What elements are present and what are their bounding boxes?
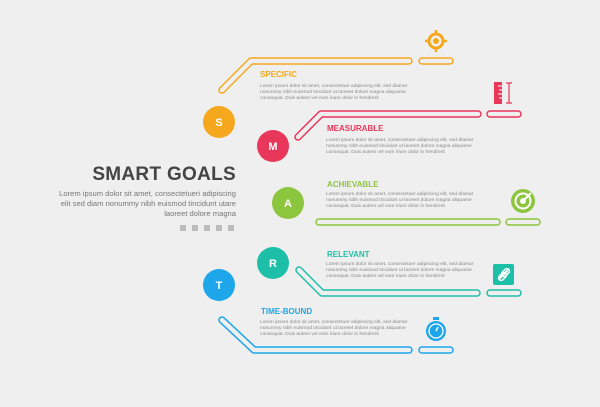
text: specific <box>260 70 408 101</box>
text: time-bound <box>260 307 408 337</box>
text: TIME-BOUND <box>261 307 312 316</box>
bar: achievable <box>319 218 537 226</box>
icon: stopwatch <box>426 317 446 341</box>
text: SPECIFIC <box>260 70 297 79</box>
icon: target <box>511 189 535 213</box>
text: achievable <box>326 180 474 209</box>
text: Lorem ipsum dolor sit amet, consectetuer adipiscing elit, sed diamar nonummy nibh euismod tincidunt ut laoreet dolore magna aliquame consequat. Duis autem vel eum iriure dolor in hendrerit <box>260 84 407 101</box>
title block <box>59 164 236 218</box>
text: Lorem ipsum dolor sit amet, consectetuer adipiscing elit, sed diamar nonummy nibh euismod tincidunt ut laoreet dolore magna aliquame consequat. Duis autem vel eum iriure dolor in hendrerit <box>326 192 473 209</box>
text: MEASURABLE <box>327 124 383 133</box>
circle R: R <box>269 258 277 270</box>
icon: ruler <box>494 82 512 104</box>
circle M <box>257 130 289 162</box>
title: SMART GOALS <box>92 164 236 185</box>
circle S <box>203 106 235 138</box>
circle T: T <box>216 280 223 292</box>
text: Lorem ipsum dolor sit amet, consectetuer adipiscing elit, sed diamar nonummy nibh euismod tincidunt ut laoreet dolore magna aliquame consequat. Duis autem vel eum iriure dolor in hendrerit <box>326 262 473 279</box>
text: RELEVANT <box>327 250 370 259</box>
icon: link <box>493 264 514 285</box>
bar: time-bound <box>222 320 450 350</box>
text: ACHIEVABLE <box>327 180 378 189</box>
icon: crosshair <box>425 30 447 52</box>
circle T <box>203 269 235 301</box>
circle A: A <box>284 198 292 210</box>
bar: relevant <box>299 270 518 293</box>
text: Lorem ipsum dolor sit amet, consectetuer adipiscing elit, sed diamar nonummy nibh euismod tincidunt ut laoreet dolore magna aliquame consequat. Duis autem vel eum iriure dolor in hendrerit <box>260 320 407 337</box>
circle R <box>257 247 289 279</box>
circle A <box>272 187 304 219</box>
text: Lorem ipsum dolor sit amet, consectetuer adipiscing elit, sed diamar nonummy nibh euismod tincidunt ut laoreet dolore magna aliquame consequat. Duis autem vel eum iriure dolor in hendrerit <box>326 138 473 155</box>
circle S: S <box>215 117 223 129</box>
bar: measurable <box>298 114 518 137</box>
circle M: M <box>268 141 278 153</box>
description: Lorem ipsum dolor sit amet, consectetueri adipiscing elit sed diam nonummy nibh euismod tincidunt utare laoreet dolore magna <box>59 189 236 218</box>
bar: specific <box>222 61 450 90</box>
text: measurable <box>326 124 474 155</box>
text: relevant <box>326 250 474 279</box>
decorative squares <box>180 225 234 231</box>
